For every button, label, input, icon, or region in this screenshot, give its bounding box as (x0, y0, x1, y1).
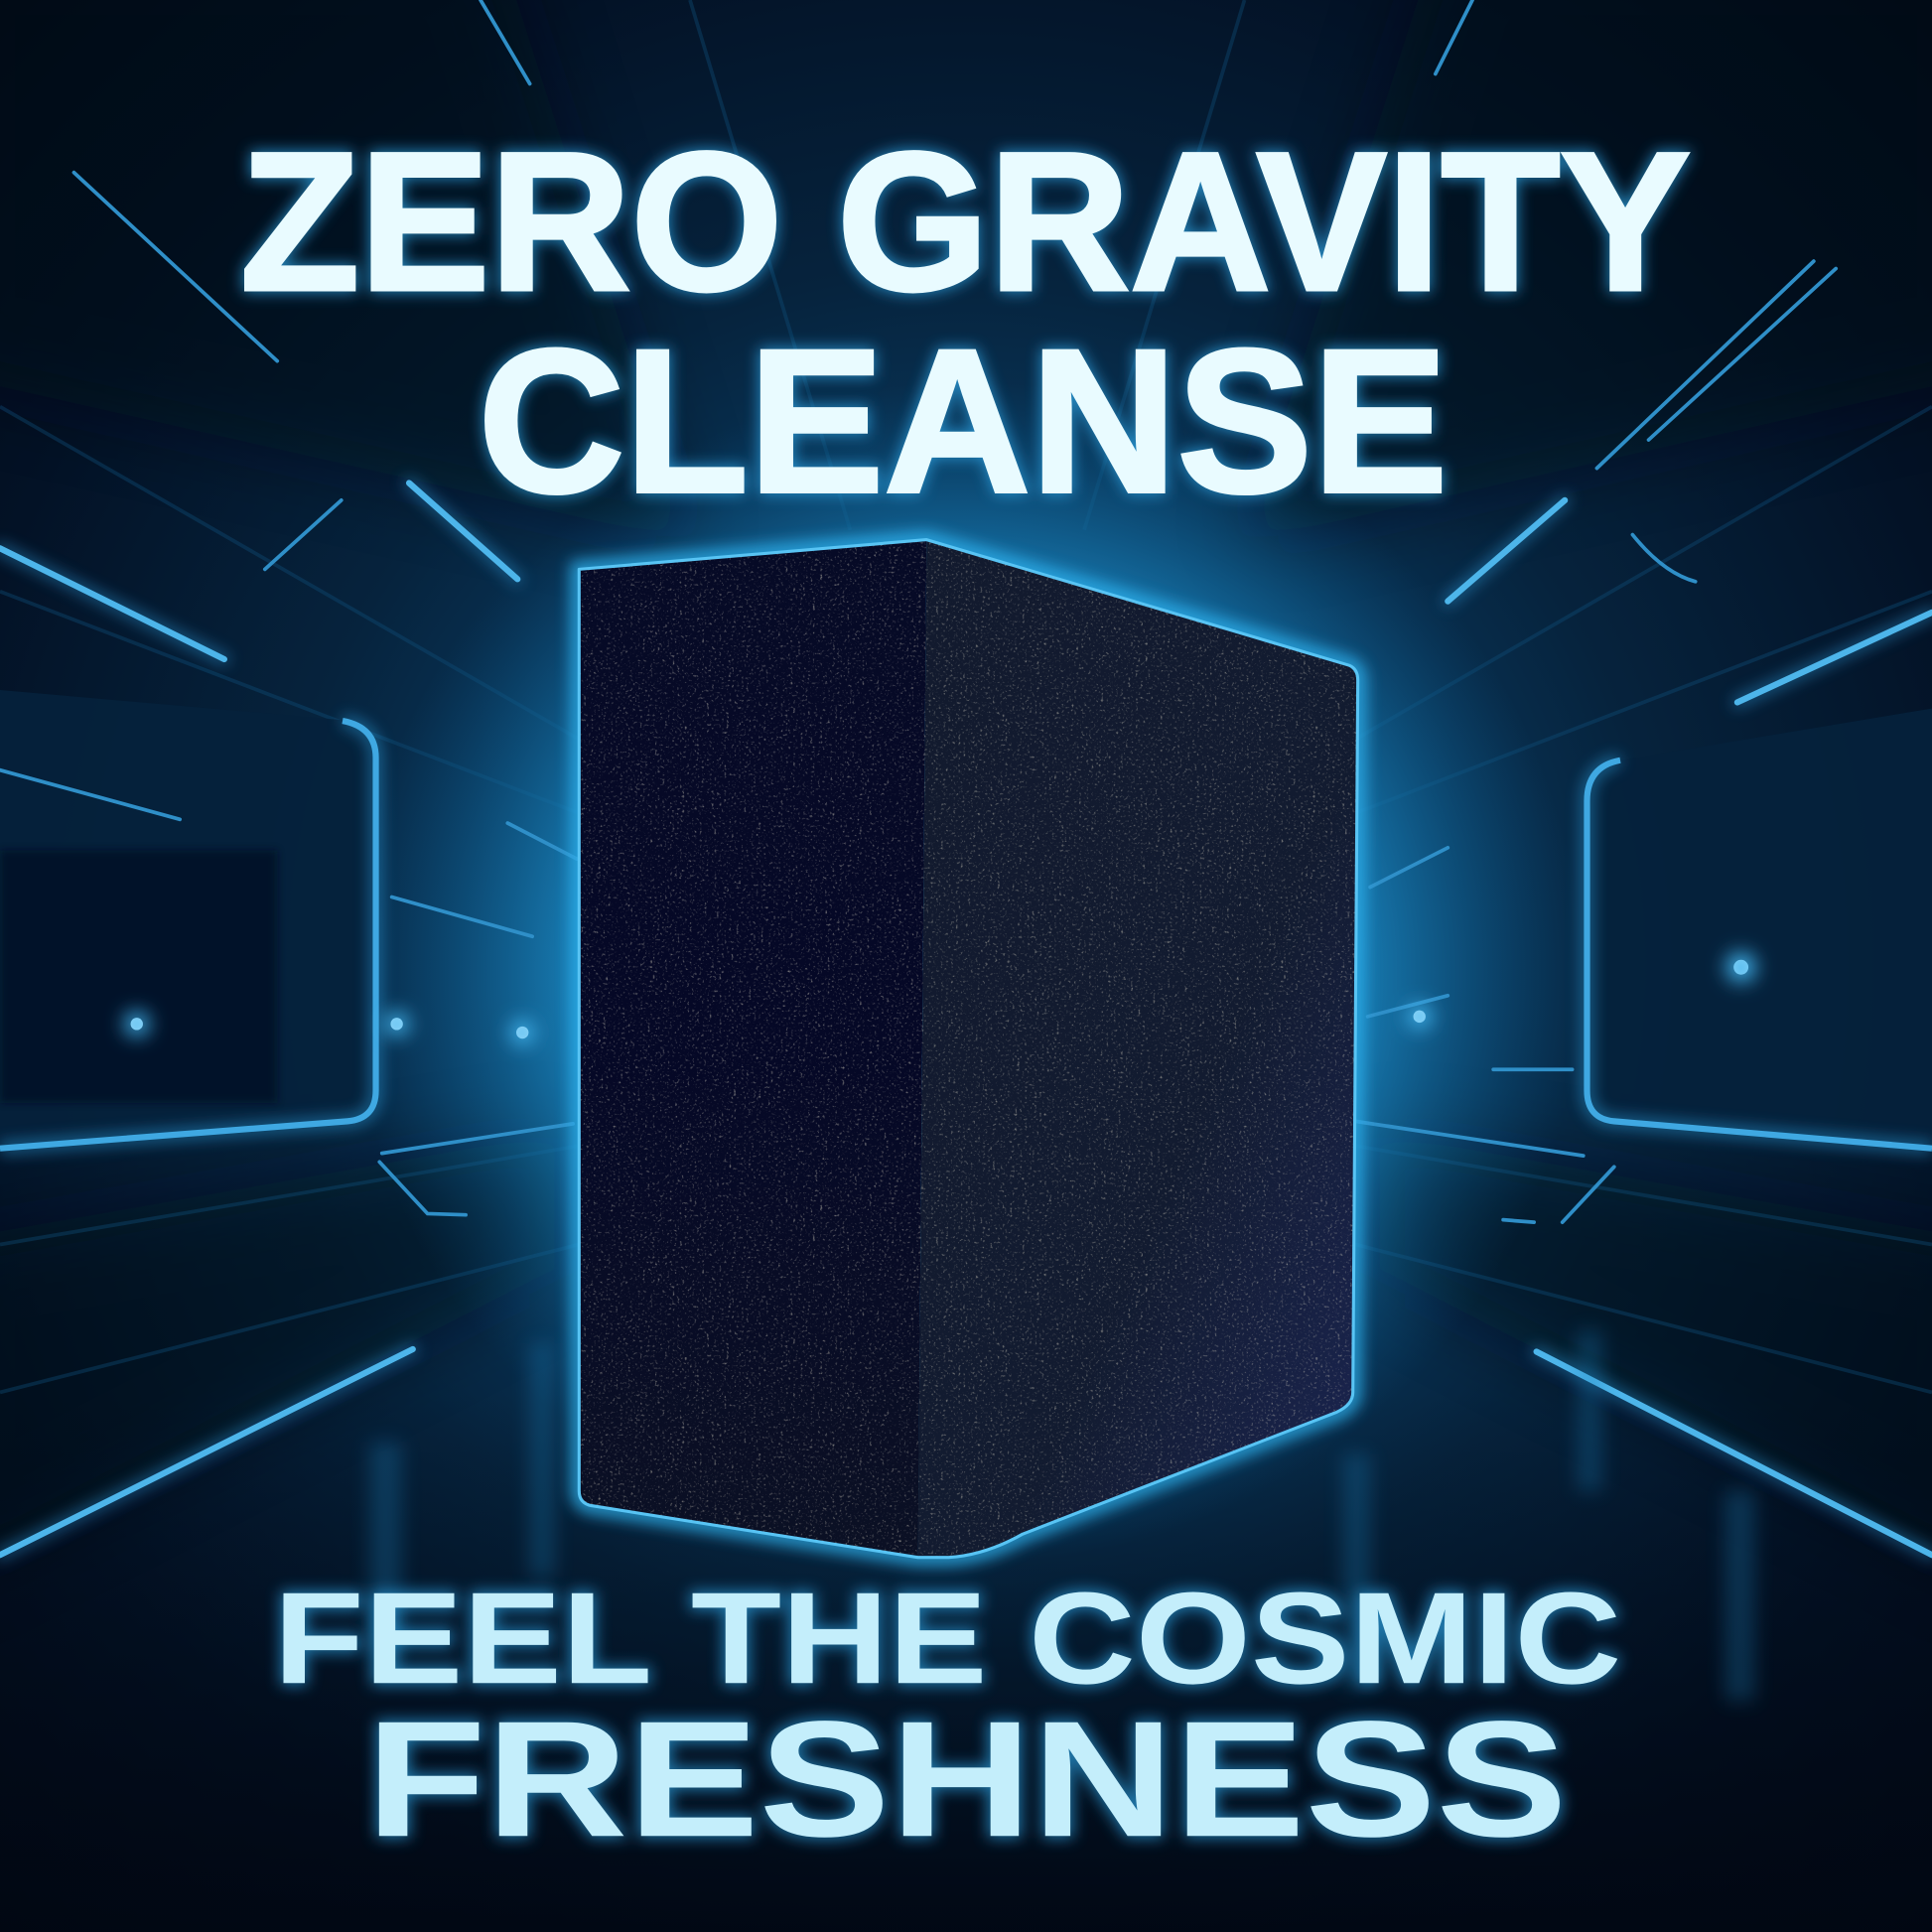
soap speckle (567, 530, 1368, 1565)
central glow behind soap (349, 382, 1583, 1565)
tagline line 1: FEEL THE COSMIC (274, 1565, 1621, 1711)
floor reflections (369, 1330, 1754, 1701)
panel: left wall frame (0, 690, 376, 1149)
soap right face (918, 540, 1358, 1558)
title: ZERO GRAVITY (240, 112, 1691, 333)
soap left face (579, 540, 926, 1558)
tagline: FRESHNESS (366, 1687, 1568, 1871)
light dots (124, 952, 1756, 1044)
title line 1: ZERO GRAVITY (240, 112, 1691, 333)
soap glow (579, 540, 1358, 1558)
soap outline (579, 540, 1358, 1558)
panel: right wall frame (1587, 709, 1932, 1149)
soap bar (567, 530, 1368, 1565)
tagline line 2: FRESHNESS (366, 1687, 1568, 1871)
title (240, 112, 1691, 535)
title: CLEANSE (479, 307, 1448, 535)
tagline: FEEL THE COSMIC (274, 1565, 1621, 1711)
tagline (274, 1565, 1621, 1871)
title line 2: CLEANSE (479, 307, 1448, 535)
